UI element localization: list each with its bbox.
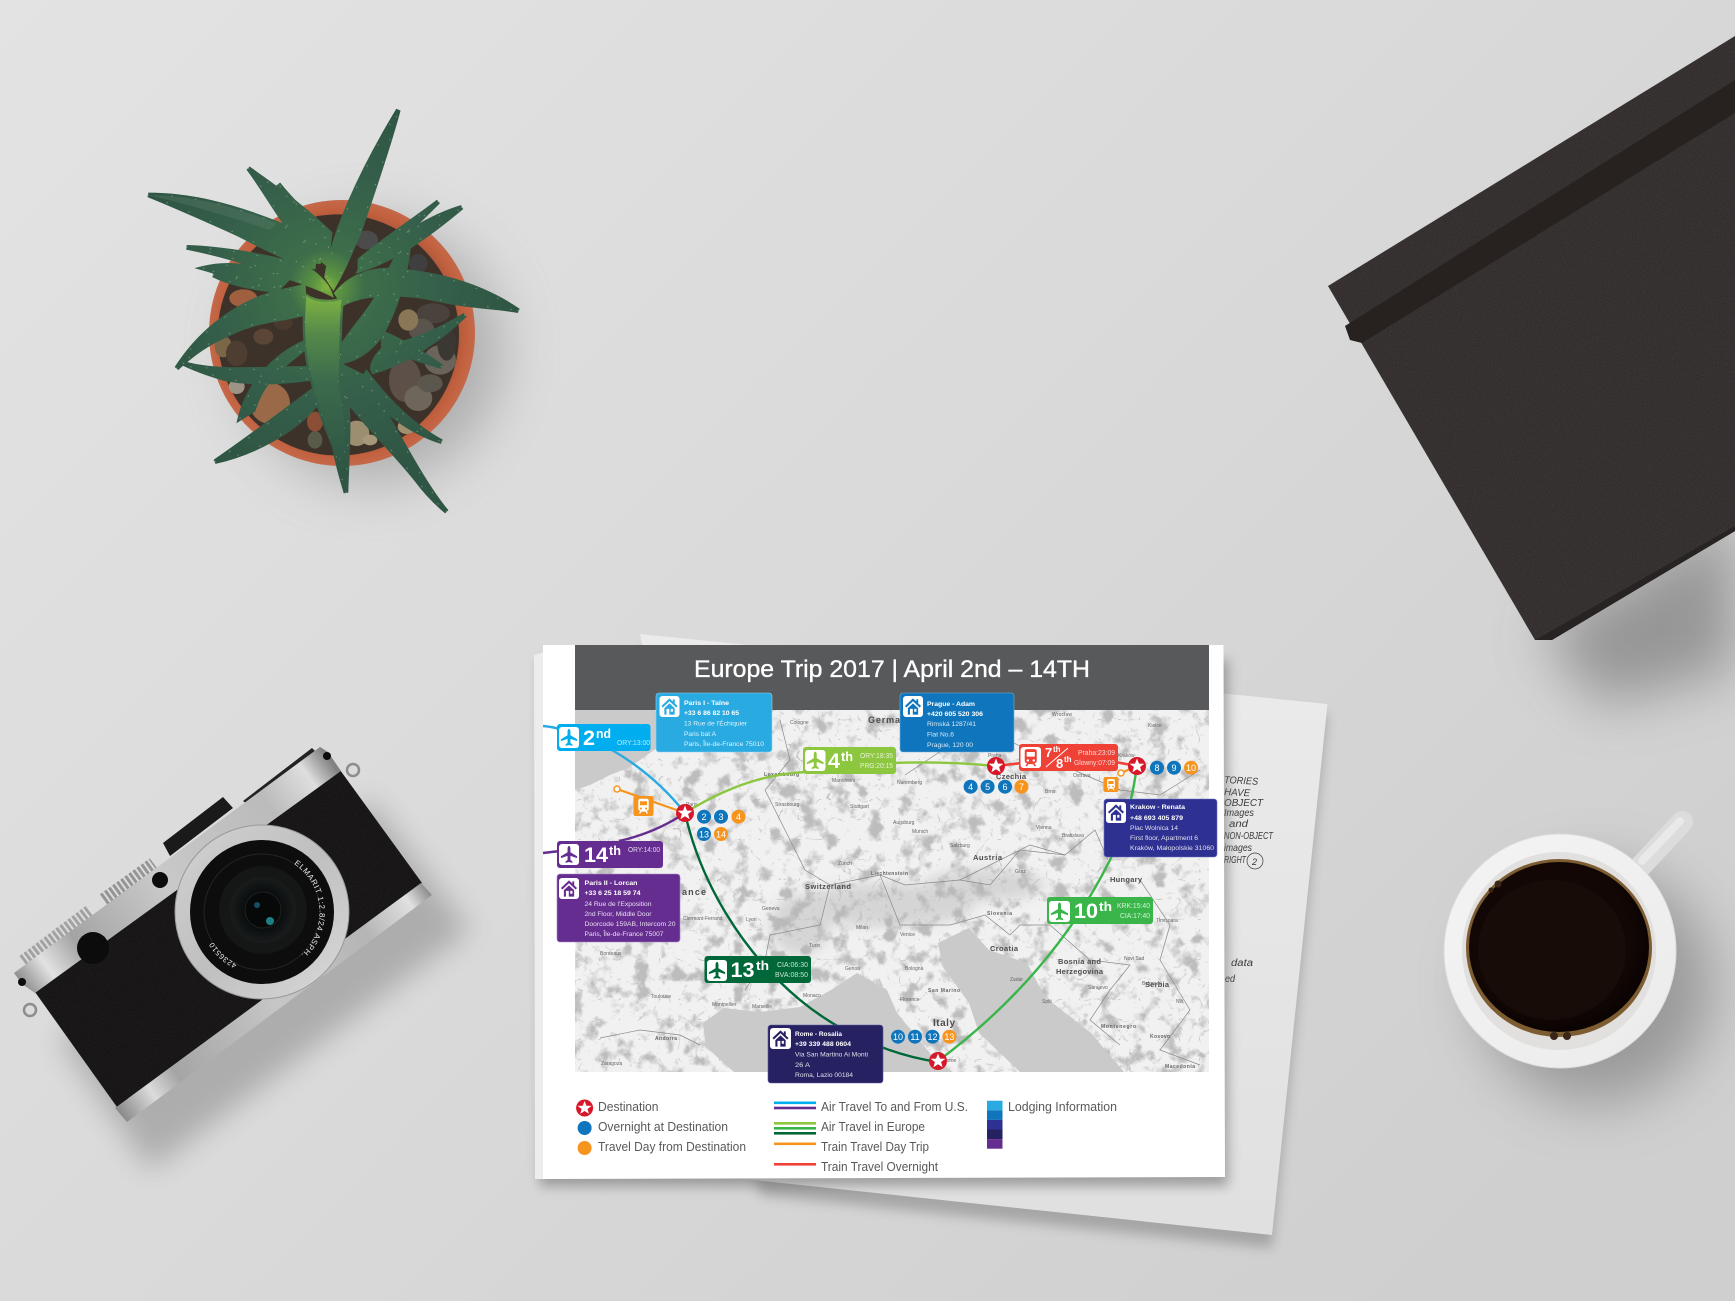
- map city labels: San Marino: [928, 988, 960, 994]
- day markers: Rome: 12: [927, 1032, 938, 1042]
- map city labels: Graz: [1015, 869, 1026, 875]
- legend: lodging: [987, 1100, 1117, 1149]
- day markers: Krakow: 9: [1171, 763, 1177, 773]
- map city labels: Ostrava: [1073, 773, 1091, 779]
- map city labels: Kosovo: [1150, 1034, 1170, 1040]
- map city labels: Augsburg: [893, 820, 915, 826]
- camera bottom silver plate: [115, 883, 432, 1122]
- route: train Prague to Krakow: [996, 762, 1137, 766]
- lodging card: Prague: [900, 693, 1014, 752]
- cup handle: [1640, 821, 1682, 867]
- route: air to Paris (2nd): [543, 726, 685, 813]
- badge: 4th: ORY:18:35: [860, 751, 893, 760]
- map city labels: Milan: [856, 925, 868, 931]
- map city labels: Clermont-Ferrand: [683, 916, 723, 922]
- lodging card: Prague: Prague - Adam: [927, 701, 975, 708]
- lodging card: Paris II: 24 Rue de l'Exposition: [584, 901, 652, 908]
- map city labels: Toulouse: [651, 994, 671, 1000]
- lodging card: Rome: [768, 1025, 883, 1083]
- map city labels: Mannheim: [832, 778, 855, 784]
- badge: 14th: 14: [584, 844, 608, 867]
- handwritten notes: and: [1229, 819, 1248, 830]
- camera top dials and hot shoe: [24, 748, 359, 1016]
- map city labels: Brno: [1045, 789, 1056, 795]
- lodging card: Paris II: [557, 874, 680, 942]
- lodging card: Krakow: +48 693 405 879: [1130, 815, 1183, 822]
- legend: travel day: Travel Day from Destination: [598, 1140, 746, 1154]
- map city labels: Bordeaux: [600, 951, 622, 957]
- map city labels: [600, 712, 1195, 1070]
- camera lens: 4236510: [210, 943, 236, 968]
- map city labels: Zadar: [1010, 977, 1023, 983]
- lodging card: Rome: Rome - Rosalia: [795, 1031, 842, 1038]
- lodging card: Prague: Rimská 1287/41: [927, 721, 976, 728]
- lodging card: Paris II: 2nd Floor, Middle Door: [584, 911, 652, 918]
- cup inner wall: [1462, 852, 1656, 1050]
- day markers: Rome: 11: [910, 1032, 920, 1042]
- day markers: Prague: 4: [968, 782, 973, 792]
- lodging card: Paris I: Paris I - Taïne: [684, 700, 729, 707]
- handwritten notes: Images: [1224, 808, 1254, 819]
- map city labels: Vienna: [1036, 825, 1052, 831]
- map city labels: Paris: [686, 802, 698, 808]
- lodging card: Prague: Prague, 120 00: [927, 742, 973, 749]
- map city labels: Lyon: [746, 917, 757, 923]
- legend: destination: Destination: [598, 1100, 659, 1114]
- day markers: Rome: 13: [944, 1032, 954, 1042]
- camera leather body: [35, 770, 422, 1107]
- badge: 13th: BVA:08:50: [775, 970, 808, 979]
- aloe leaves: [148, 110, 518, 512]
- day markers: Paris: 14: [716, 829, 726, 839]
- lodging card: Rome: Via San Martino Ai Monti: [795, 1052, 868, 1058]
- day markers: Prague: 5: [985, 782, 990, 792]
- map city labels: Kraków: [1118, 753, 1135, 759]
- day markers: Rome: [891, 1030, 956, 1044]
- legend: destination: [576, 1100, 659, 1116]
- map city labels: Turin: [809, 943, 820, 949]
- map city labels: Zürich: [838, 861, 852, 867]
- badge: 14th: ORY:14:00: [628, 845, 660, 854]
- sheet underlay strip: [534, 652, 544, 1179]
- lodging card: Paris II: Paris, Île-de-France 75007: [584, 929, 664, 938]
- lodging card: Krakow: Kraków, Małopolskie 31060: [1130, 845, 1214, 852]
- badge: 14th: [557, 841, 663, 868]
- map city labels: Novi Sad: [1124, 956, 1145, 962]
- coffee cup: [1444, 821, 1713, 1103]
- alps relief: [770, 869, 1045, 955]
- map city labels: Salzburg: [950, 843, 970, 849]
- lodging card: Paris II: Paris II - Lorcan: [584, 880, 638, 887]
- map country labels: Bosnia and: [1058, 957, 1101, 966]
- lodging card: Paris I: +33 6 86 82 10 65: [684, 710, 739, 717]
- map city labels: Montenegro: [1101, 1024, 1136, 1030]
- title band: [575, 645, 1209, 710]
- cup shadow: [1477, 867, 1713, 1103]
- lodging card: Paris I: Paris bat A: [684, 731, 716, 738]
- map city labels: Munich: [912, 829, 928, 835]
- handwritten notes: images: [1224, 843, 1252, 854]
- map city labels: Marseille: [752, 1004, 772, 1010]
- day markers: Prague: 6: [1002, 782, 1008, 792]
- lodging card: Krakow: Krakow - Renata: [1130, 804, 1185, 811]
- legend: overnight: Overnight at Destination: [598, 1120, 728, 1134]
- lodging card: Krakow: Plac Wolnica 14: [1130, 825, 1178, 832]
- borders: [600, 720, 1200, 1065]
- map city labels: Strasbourg: [775, 802, 800, 808]
- lodging card: Paris I: [656, 693, 772, 752]
- handwritten notes: [1224, 775, 1274, 985]
- route: day trip from Paris: [614, 786, 685, 813]
- camera shadow: [60, 800, 470, 1170]
- day markers: Rome: 10: [893, 1032, 903, 1042]
- handwritten notes: TORIES: [1224, 775, 1259, 788]
- map city labels: Sarajevo: [1088, 985, 1108, 991]
- lodging card: Prague: Flat No.6: [927, 732, 954, 738]
- legend: overnight train: Train Travel Overnight: [821, 1160, 938, 1174]
- map: [575, 710, 1209, 1072]
- map city labels: Zaragoza: [601, 1061, 622, 1067]
- title: Europe Trip 2017 | April 2nd – 14TH: [694, 656, 1090, 683]
- route: Paris to Prague (4th): [685, 762, 996, 813]
- map country labels: Austria: [973, 853, 1003, 862]
- route: day trip from Krakow: [1118, 766, 1137, 776]
- map country labels: Herzegovina: [1056, 967, 1104, 976]
- badge: 13th: CIA:06:30: [777, 960, 808, 969]
- badge: 7th / 8th train: [1019, 744, 1118, 771]
- legend: lodging: Lodging Information: [1008, 1100, 1117, 1114]
- day markers: Krakow: 10: [1186, 763, 1196, 773]
- camera lens: [174, 824, 350, 1000]
- handwritten notes: 2: [1251, 857, 1257, 867]
- map country labels: Italy: [933, 1018, 955, 1029]
- camera lens: ELMARIT 1:2.8/24 ASPH.: [294, 860, 325, 956]
- day markers: Paris: [697, 810, 746, 841]
- badge: 2nd: [557, 724, 650, 751]
- badge: 7th / 8th train: th: [1064, 755, 1072, 764]
- legend: day trip train: Train Travel Day Trip: [821, 1140, 929, 1154]
- map city labels: Kielce: [1148, 723, 1162, 729]
- map city labels: Belgrade: [1142, 981, 1162, 987]
- back sheet of paper: [640, 634, 1328, 1248]
- day markers: Krakow: [1150, 761, 1198, 775]
- map city labels: Bratislava: [1062, 833, 1084, 839]
- badge: 10th: 10: [1074, 900, 1098, 923]
- badge: 10th: KRK:15:40: [1117, 901, 1150, 910]
- lodging card: Paris I: 13 Rue de l'Échiquier: [684, 718, 748, 728]
- map city labels: Florence: [900, 997, 920, 1003]
- route: Paris to Rome (13th): [685, 813, 938, 1062]
- destination star: Krakow: [1128, 757, 1146, 775]
- lodging card: Krakow: [1104, 799, 1217, 857]
- route: Rome to Krakow (10th): [938, 766, 1137, 1061]
- map city labels: Wrocław: [1052, 712, 1072, 718]
- badge: 4th: th: [841, 749, 853, 764]
- handwritten notes: HAVE: [1224, 787, 1251, 799]
- legend: [576, 1100, 1117, 1174]
- map city labels: Andorra: [655, 1036, 677, 1042]
- sheet paper: [543, 645, 1225, 1179]
- badge: 13th: th: [756, 958, 769, 973]
- camera buttons: [18, 752, 331, 986]
- badge: 4th: [803, 747, 896, 774]
- map city labels: Rome: [943, 1058, 957, 1064]
- destination star: Paris: [676, 804, 694, 822]
- map city labels: Split: [1042, 999, 1052, 1005]
- map city labels: Liechtenstein: [871, 871, 908, 877]
- main sheet: itinerary map: [534, 645, 1228, 1186]
- train icon: Krakow day trip: [1104, 777, 1118, 792]
- destination star: Rome: [929, 1052, 947, 1070]
- map city labels: Osijek: [1120, 908, 1134, 914]
- badge: 4th: PRG:20:15: [860, 761, 893, 770]
- map country labels: Czechia: [996, 772, 1027, 781]
- day markers: Paris: 4: [736, 812, 741, 822]
- badge: 4th: 4: [828, 750, 840, 773]
- badge: 7th / 8th train: 7: [1045, 745, 1052, 760]
- map city labels: Montpellier: [712, 1002, 737, 1008]
- badge: 10th: th: [1099, 899, 1112, 914]
- route: air from Paris (14th): [543, 813, 685, 853]
- day markers: Prague: 7: [1019, 782, 1024, 792]
- badge: 7th / 8th train: Glowny:07:09: [1074, 758, 1115, 767]
- camera leather texture: [30, 765, 430, 1110]
- lodging card: Rome: +39 339 488 0604: [795, 1041, 851, 1048]
- map city labels: Bologna: [905, 966, 924, 972]
- coffee surface: [1466, 859, 1652, 1040]
- badge: 14th: th: [609, 843, 621, 858]
- map city labels: Luxembourg: [764, 772, 799, 778]
- day markers: Paris: 2: [701, 812, 707, 822]
- soil and pebbles: [215, 214, 459, 456]
- handwritten notes: NON-OBJECT: [1224, 831, 1274, 842]
- map city labels: Timișoara: [1156, 918, 1178, 924]
- badge: 7th / 8th train: Praha:23:09: [1078, 748, 1115, 757]
- map country labels: ance: [682, 887, 706, 897]
- map country labels: Switzerland: [805, 882, 851, 891]
- badge: 2nd: nd: [596, 726, 611, 741]
- map country labels: Germa: [868, 715, 901, 725]
- badge: 13th: 13: [730, 959, 754, 982]
- map city labels: Niš: [1176, 999, 1184, 1005]
- badge: 2nd: ORY:13:00: [617, 738, 650, 747]
- badge: 2nd: 2: [583, 727, 595, 750]
- camera: [14, 747, 473, 1174]
- sheet shadow: [540, 660, 1228, 1186]
- map city labels: Monaco: [803, 993, 821, 999]
- handwritten notes: RIGHT: [1224, 855, 1247, 866]
- camera top silver plate: [14, 747, 341, 993]
- destination star: Prague: [987, 757, 1005, 775]
- map country labels: Croatia: [990, 944, 1019, 953]
- day markers: Paris: 3: [718, 812, 724, 822]
- handwritten notes: OBJECT: [1224, 798, 1264, 809]
- map city labels: Venice: [900, 932, 915, 938]
- legend: air to and from US: Air Travel To and From U.S.: [821, 1100, 968, 1114]
- lodging card: Krakow: First floor, Apartment 6: [1130, 835, 1198, 842]
- lodging card: Paris II: +33 6 25 18 59 74: [584, 890, 641, 897]
- train icon: Paris day trip: [634, 796, 654, 816]
- terracotta pot: [209, 200, 475, 466]
- map city labels: Genoa: [845, 966, 860, 972]
- handwritten notes: data: [1231, 958, 1253, 969]
- map country labels: [682, 715, 1170, 1029]
- cup rim: [1444, 834, 1676, 1068]
- badge: 10th: [1047, 897, 1153, 924]
- day markers: Paris: 13: [699, 829, 709, 839]
- notebook: [1328, 36, 1735, 705]
- potted plant: [148, 110, 518, 512]
- day markers: Prague: [964, 780, 1028, 794]
- badge: 7th / 8th train: th: [1053, 745, 1061, 754]
- badge: 13th: [704, 956, 811, 983]
- lodging card: Rome: Roma, Lazio 00184: [795, 1072, 853, 1079]
- lodging card: Prague: +420 605 520 306: [927, 711, 983, 718]
- lodging card: Rome: 26 A: [795, 1062, 811, 1069]
- plant shadow: [242, 222, 502, 482]
- map city labels: Cologne: [790, 720, 809, 726]
- map country labels: Serbia: [1145, 980, 1170, 989]
- map city labels: Slovenia: [987, 911, 1012, 917]
- seas: [575, 710, 1124, 1072]
- day markers: Krakow: 8: [1154, 763, 1160, 773]
- badge: 10th: CIA:17:40: [1120, 911, 1150, 920]
- map city labels: Nuremberg: [897, 780, 922, 786]
- map country labels: Hungary: [1110, 875, 1143, 884]
- map city labels: Praha: [988, 753, 1002, 759]
- legend: air in Europe: Air Travel in Europe: [821, 1120, 925, 1134]
- lodging card: Paris II: Doorcode 159AB, Intercom 20: [584, 921, 676, 928]
- map city labels: Macedonia: [1165, 1064, 1195, 1070]
- lodging card: Paris I: Paris, Île-de-France 75010: [684, 739, 764, 748]
- map city labels: Geneva: [762, 906, 780, 912]
- handwritten notes: ed: [1225, 974, 1235, 985]
- map city labels: Stuttgart: [850, 804, 870, 810]
- badge: 7th / 8th train: 8: [1056, 756, 1063, 771]
